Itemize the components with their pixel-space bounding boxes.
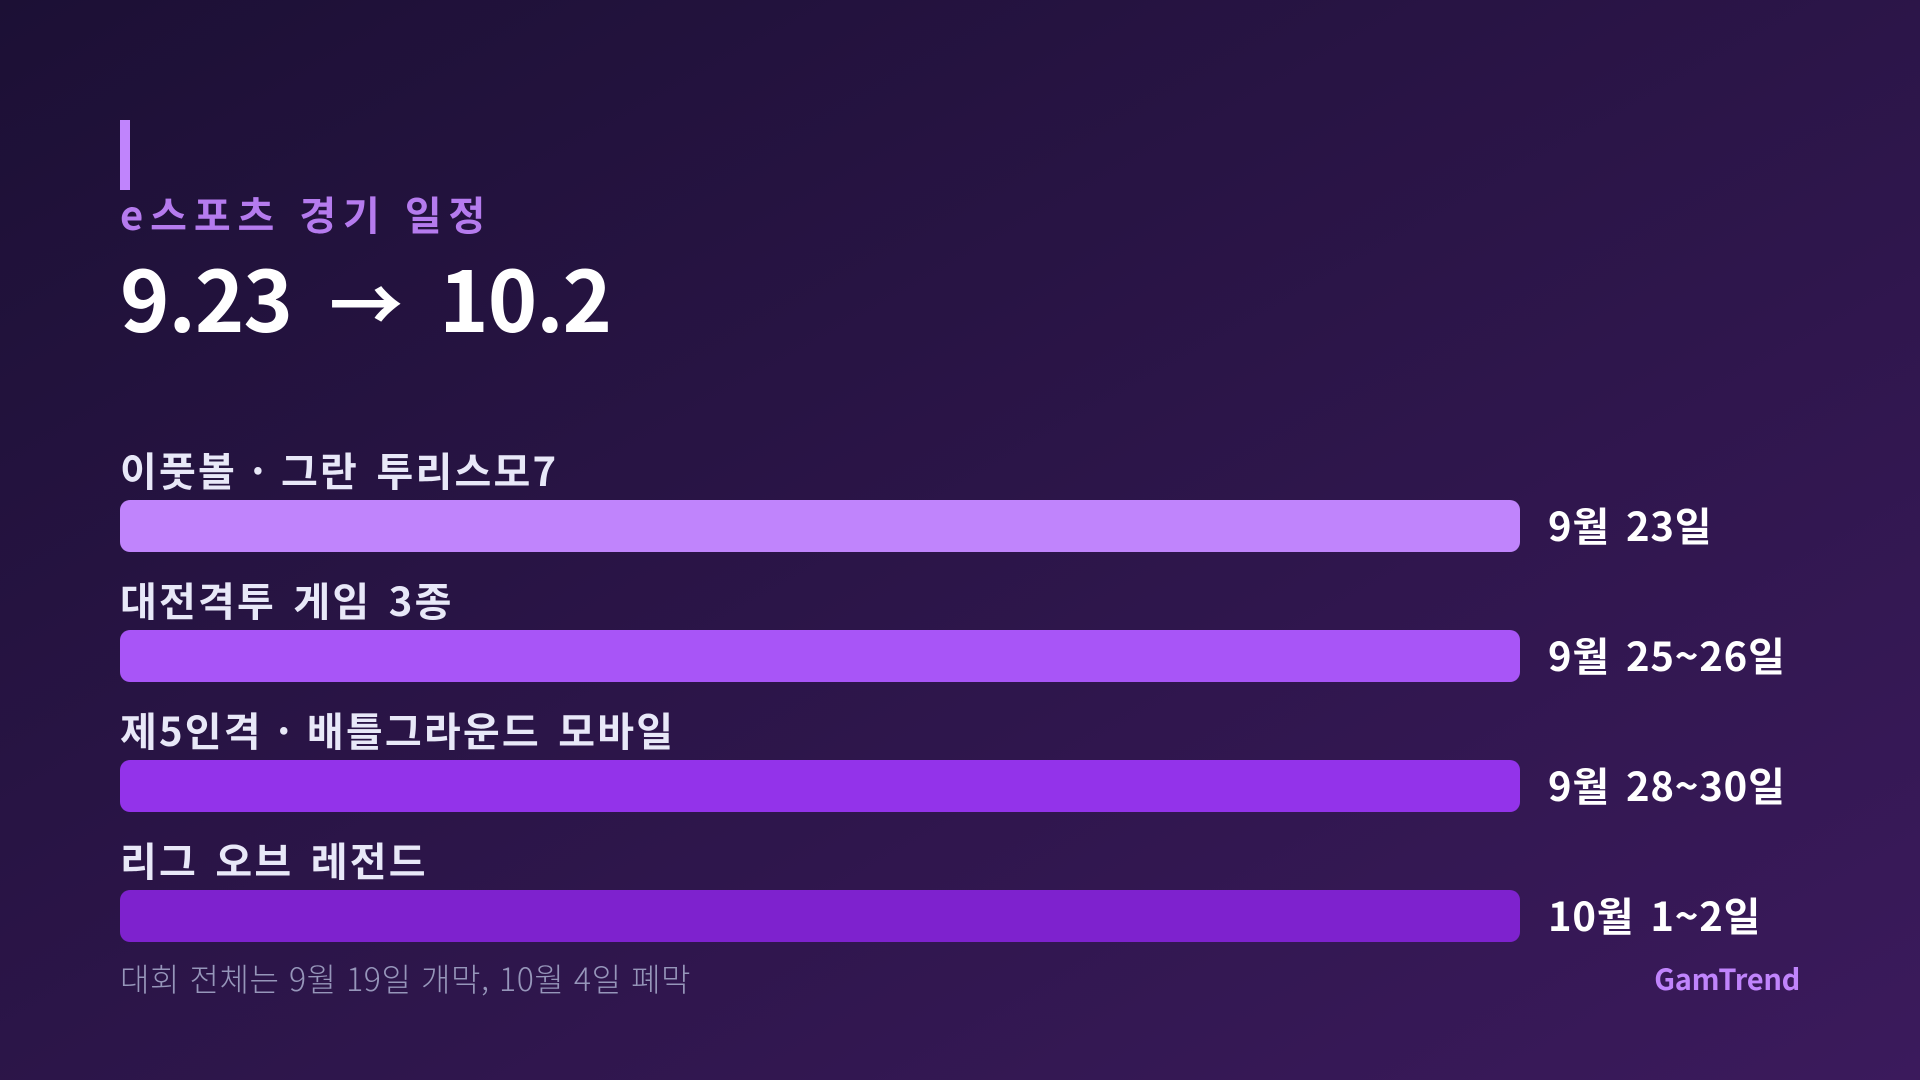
eyebrow heading: e스포츠 경기 일정 <box>120 184 492 242</box>
row: 제5인격 · 배틀그라운드 모바일 <box>120 700 1786 813</box>
bar <box>120 630 1520 682</box>
footnote: 대회 전체는 9월 19일 개막, 10월 4일 폐막 <box>120 955 691 1001</box>
date value: 9월 23일 <box>1548 495 1712 553</box>
brand mark: GamTrend <box>1654 957 1800 999</box>
label: 이풋볼 · 그란 투리스모7 <box>120 440 558 498</box>
row: 리그 오브 레전드 <box>120 830 1761 943</box>
bar <box>120 500 1520 552</box>
row: 이풋볼 · 그란 투리스모7 <box>120 440 1712 553</box>
label: 대전격투 게임 3종 <box>120 570 454 628</box>
label: 리그 오브 레전드 <box>120 830 428 888</box>
bar <box>120 890 1520 942</box>
bar <box>120 760 1520 812</box>
date value: 9월 25~26일 <box>1548 625 1786 683</box>
date value: 9월 28~30일 <box>1548 755 1786 813</box>
row: 대전격투 게임 3종 <box>120 570 1786 683</box>
accent bar <box>120 120 130 190</box>
label: 제5인격 · 배틀그라운드 모바일 <box>120 700 675 758</box>
title: date range: 9.23 → 10.2 <box>120 236 611 357</box>
date value: 10월 1~2일 <box>1548 885 1761 943</box>
